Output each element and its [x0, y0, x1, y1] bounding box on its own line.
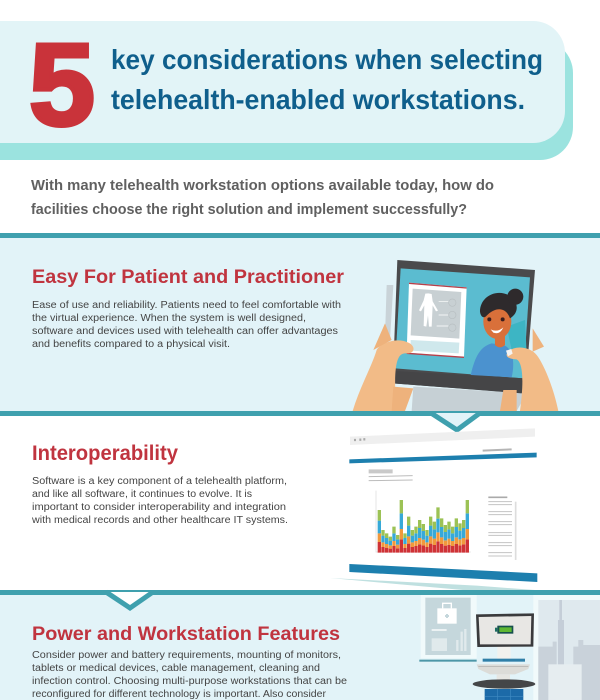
chevron divider: [431, 413, 480, 430]
title: [111, 44, 543, 115]
body text: ease of use: the virtual experience. When the system is well designed,: [32, 313, 306, 324]
body text: software: important to consider interoperability and integration: [32, 502, 286, 513]
big number five: 5: [29, 19, 95, 150]
heading: power and workstation features: Power and Workstation Features: [32, 624, 340, 645]
heading: easy for patient and practitioner: Easy For Patient and Practitioner: [32, 267, 345, 288]
body text: software: [31, 476, 288, 526]
body text: software: with medical records and other healthcare IT systems.: [31, 515, 288, 526]
intro text: facilities choose the right solution and implement successfully?: [31, 201, 467, 218]
title: key considerations when selecting: [111, 44, 543, 75]
body text: consider power: Consider power and battery requirements, mounting of monitors,: [32, 650, 341, 661]
body text: ease of use: software and devices used with telehealth can offer advantages: [32, 326, 338, 337]
battery icon: [495, 626, 513, 634]
tablet body: [393, 260, 535, 393]
heading: interoperability: Interoperability: [32, 442, 178, 465]
body text: consider power: reconfigured for different technology is important. Also consider: [32, 689, 327, 700]
nurse on screen: [471, 289, 527, 377]
body text: ease of use: [32, 300, 341, 350]
hands holding tablet: [353, 323, 558, 411]
workstation cart: [473, 659, 535, 700]
workstation monitor: [476, 613, 534, 660]
body text: consider power: infection control. Choosing multi-purpose workstations that can be: [32, 676, 347, 687]
illustration: workstation in a room: [419, 595, 600, 700]
header panel: [0, 19, 573, 160]
body text: ease of use: Ease of use and reliability. Patients need to feel comfortable with: [32, 300, 341, 311]
panel: interoperability: [0, 411, 600, 591]
chart legend list: [488, 497, 516, 560]
illustration: software dashboard: [330, 428, 543, 591]
body text: ease of use: and benefits compared to a physical visit.: [32, 339, 230, 350]
intro text: [31, 177, 494, 218]
wall poster: [419, 595, 477, 662]
panel: easy for patient and practitioner: [0, 233, 600, 411]
panel: power and workstation features: [0, 590, 600, 700]
illustration: tablet telehealth call: [353, 260, 558, 411]
chevron divider: [106, 592, 153, 608]
intro text: With many telehealth workstation options available today, how do: [31, 177, 494, 194]
body text: consider power: [32, 650, 347, 700]
patient record card: [407, 283, 467, 358]
body text: software: and like all software, it continues to evolve. It is: [32, 489, 252, 500]
window with city skyline: [533, 595, 600, 700]
stacked bar chart: [376, 491, 471, 553]
title: telehealth-enabled workstations.: [111, 84, 525, 115]
body text: consider power: tablets or medical devices, cable management, cleaning and: [32, 663, 320, 674]
tablet lower bezel: [393, 371, 525, 393]
body text: software: Software is a key component of a telehealth platform,: [32, 476, 287, 487]
